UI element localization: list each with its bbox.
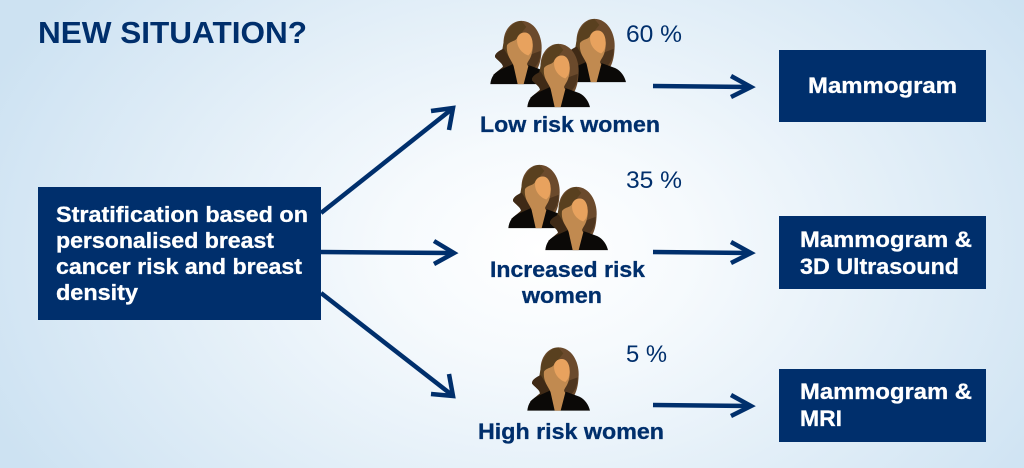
panel: mammogram and MRI: MRI: [800, 406, 842, 431]
icon: one woman: [527, 347, 590, 411]
label: increased risk women: Increased risk: [490, 257, 646, 282]
label: increased risk women: [490, 257, 646, 308]
label: increased risk women: women: [521, 283, 602, 308]
label: low risk women: Low risk women: [480, 112, 660, 137]
panel: mammogram and 3D ultrasound: Mammogram &: [800, 227, 972, 252]
percentage: 60: 60 %: [626, 21, 682, 48]
arrow: to mammogram and MRI: [653, 395, 751, 416]
percentage: 5: 5 %: [626, 341, 667, 368]
percentage: 35: 35 %: [626, 167, 682, 194]
panel: mammogram: Mammogram: [808, 73, 957, 98]
panel: mammogram: [779, 50, 986, 122]
panel: mammogram and MRI: [779, 369, 986, 442]
panel: mammogram and 3D ultrasound: 3D Ultrasound: [800, 254, 959, 279]
arrow: to mammogram and ultrasound: [653, 242, 751, 263]
arrow: to low risk: [321, 108, 453, 213]
label: high risk women: High risk women: [478, 419, 664, 444]
title: NEW SITUATION?: [38, 15, 307, 50]
arrow: to mammogram: [653, 76, 751, 97]
arrow: to increased risk: [321, 241, 454, 264]
panel: stratification: density: [56, 280, 139, 305]
panel: mammogram and 3D ultrasound: [779, 216, 986, 289]
panel: stratification: Stratification based on: [56, 202, 308, 227]
panel: mammogram and MRI: Mammogram &: [800, 379, 972, 404]
icon: three women: [490, 19, 626, 107]
icon: two women: [508, 165, 608, 250]
panel: stratification: [38, 187, 321, 320]
arrow: to high risk: [321, 293, 453, 396]
panel: stratification: cancer risk and breast: [56, 254, 303, 279]
panel: stratification: personalised breast: [56, 228, 275, 253]
